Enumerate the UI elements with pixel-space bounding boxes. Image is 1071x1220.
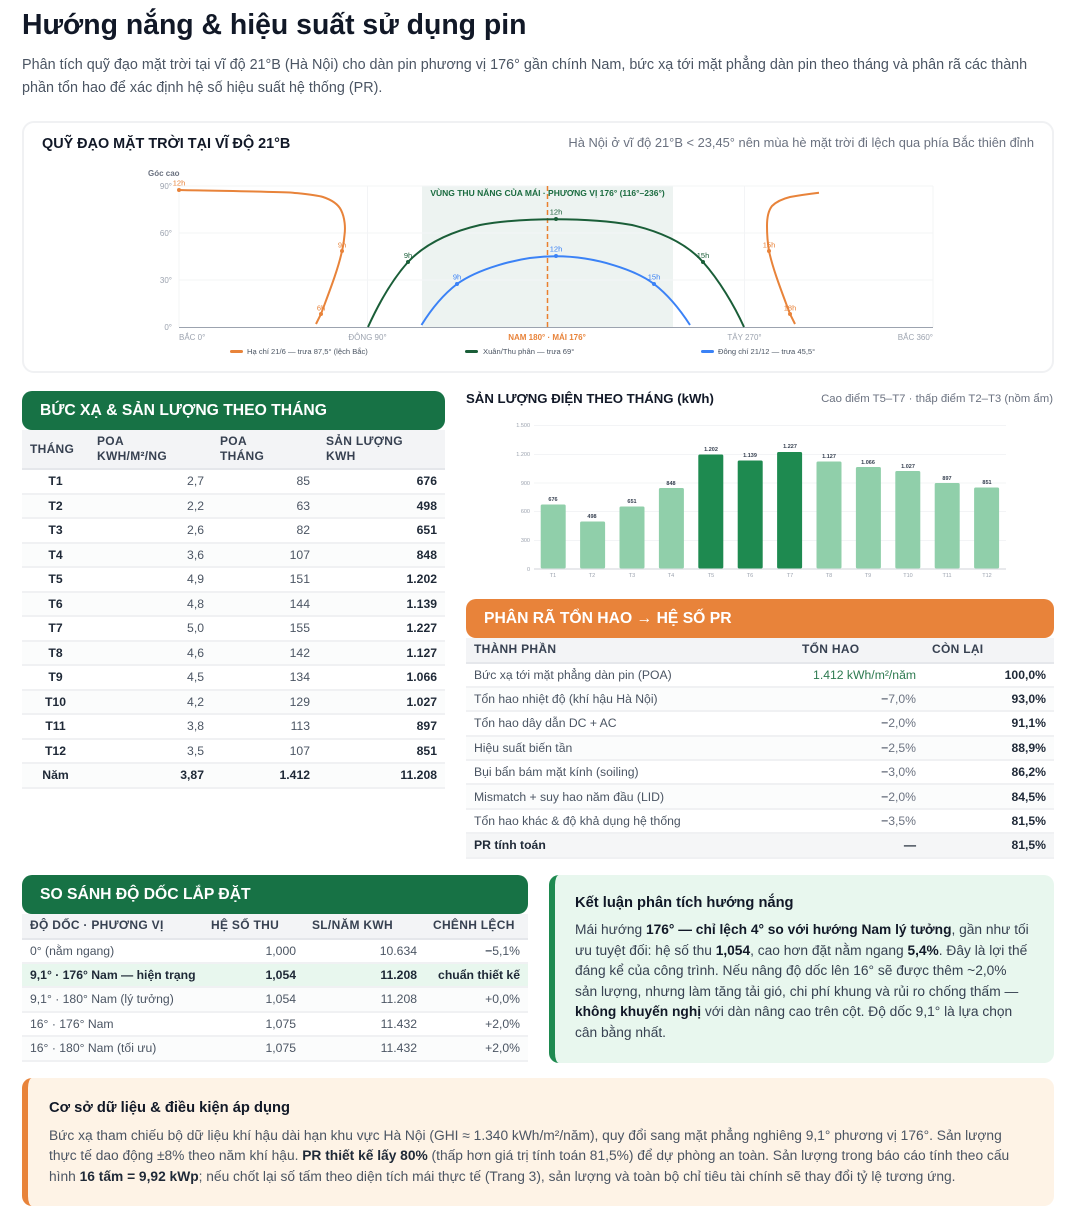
loss table: 1.412 kWh/m²/năm (813, 668, 916, 682)
loss table: −3,5% (881, 814, 916, 828)
data basis text (49, 1128, 1009, 1184)
monthly bar chart: T1 (550, 573, 556, 579)
conclusion text: sản lượng, nhưng làm tăng tải gió, chi phí khung và rủi ro chống thấm — (575, 984, 1018, 999)
tilt heading (22, 875, 528, 914)
monthly table: T7 (48, 621, 63, 635)
monthly table: 134 (290, 670, 310, 684)
bar chart heading: SẢN LƯỢNG ĐIỆN THEO THÁNG (kWh) (466, 391, 714, 406)
sun path chart: BẮC 0° (179, 333, 205, 342)
data basis text: hình 16 tấm = 9,92 kWp; nếu chốt lại số tấm theo diện tích mái thực tế (Trang 3), sản lượng và toàn bộ chỉ tiêu tài chính sẽ thay đổi tỷ lệ tương ứng. (49, 1168, 955, 1184)
sun path chart: ĐÔNG 90° (348, 333, 387, 342)
loss table: 81,5% (1011, 814, 1046, 828)
tilt table: HỆ SỐ THU (211, 918, 279, 932)
sun path chart: 0° (164, 323, 172, 332)
monthly bar chart: 300 (521, 538, 530, 544)
monthly table: 1.027 (406, 695, 437, 709)
summer solstice curve: 6h (317, 304, 325, 312)
sun path chart: BẮC 360° (898, 333, 933, 342)
sun path chart: VÙNG THU NĂNG CỦA MÁI · PHƯƠNG VỊ 176° (116°–236°) (430, 187, 665, 198)
monthly table: 651 (417, 523, 437, 537)
sun path note: Hà Nội ở vĩ độ 21°B < 23,45° nên mùa hè mặt trời đi lệch qua phía Bắc thiên đỉnh (568, 135, 1034, 150)
data basis text: Bức xạ tham chiếu bộ dữ liệu khí hậu dài hạn khu vực Hà Nội (GHI ≈ 1.340 kWh/m²/năm), quy đổi sang mặt phẳng nghiêng 9,1° phương vị 176°. Sản lượng (49, 1128, 1002, 1142)
tilt table: +2,0% (485, 1017, 520, 1031)
monthly bar chart: 848 (666, 481, 676, 487)
summer solstice curve: 15h (763, 240, 775, 250)
loss table: −3,0% (881, 765, 916, 779)
tilt table: 0° (nằm ngang) (30, 944, 114, 958)
panel: loss breakdown (466, 599, 1054, 859)
monthly table: 1.227 (406, 621, 437, 635)
monthly bar chart: 498 (587, 514, 597, 520)
loss table: 84,5% (1011, 790, 1046, 804)
equinox curve (368, 208, 744, 327)
data basis title: Cơ sở dữ liệu & điều kiện áp dụng (49, 1100, 290, 1116)
monthly table: 129 (290, 695, 310, 709)
loss table: Tổn hao khác & độ khả dụng hệ thống (474, 814, 681, 828)
sun path chart: NAM 180° · MÁI 176° (508, 333, 586, 342)
loss table: Tổn hao nhiệt độ (khí hậu Hà Nội) (474, 692, 658, 706)
monthly bar chart: 0 (527, 567, 530, 573)
monthly bar chart: 651 (627, 499, 637, 505)
monthly table: 4,9 (187, 572, 204, 586)
conclusion text: đáng kể của công trình. Nếu nâng độ dốc lên 16° sẽ được thêm ~2,0% (575, 963, 1007, 978)
monthly table: 2,7 (187, 474, 204, 488)
tilt table: −5,1% (485, 944, 520, 958)
monthly bar chart: T4 (668, 573, 674, 579)
tilt table: 1,075 (266, 1041, 296, 1055)
winter solstice curve: 15h (648, 272, 660, 282)
monthly table: T1 (48, 474, 63, 488)
monthly table: 3,87 (180, 768, 204, 782)
monthly table: T11 (45, 719, 66, 733)
monthly bar chart: T3 (629, 573, 635, 579)
monthly table: T5 (48, 572, 63, 586)
monthly bar chart: 1.139 (743, 453, 757, 459)
winter solstice curve: 9h (453, 272, 461, 282)
conclusion text: ưu tuyệt đối: hệ số thu 1,054, cao hơn đặt nằm ngang 5,4%. Đây là lợi thế (575, 943, 1027, 958)
monthly bar chart: 676 (548, 497, 558, 503)
sun path chart: TÂY 270° (727, 333, 762, 342)
monthly table: KWH (326, 449, 356, 463)
monthly bar chart: 1.027 (901, 464, 915, 470)
loss table: Hiệu suất biến tần (474, 741, 572, 755)
tilt table: 1,000 (266, 944, 296, 958)
conclusion text: không khuyến nghị với dàn nâng cao trên cột. Độ dốc 9,1° là lựa chọn (575, 1004, 1012, 1019)
monthly bar chart: 897 (942, 476, 952, 482)
monthly bar chart: 1.066 (861, 460, 875, 466)
chart legend: Xuân/Thu phân — trưa 69° (483, 347, 574, 356)
tilt table: 1,075 (266, 1017, 296, 1031)
monthly table: 155 (290, 621, 310, 635)
monthly table: T12 (45, 744, 66, 758)
monthly table: 4,2 (187, 695, 204, 709)
monthly bar chart: 1.200 (516, 452, 530, 458)
monthly table: 4,6 (187, 646, 204, 660)
equinox curve: 12h (550, 208, 562, 216)
loss table: THÀNH PHẦN (474, 642, 556, 656)
loss table: 91,1% (1011, 716, 1046, 730)
callout: data basis (22, 1078, 1054, 1206)
tilt table: 11.208 (381, 992, 417, 1006)
tilt table: 1,054 (266, 968, 296, 982)
title: Hướng nắng & hiệu suất sử dụng pin (22, 9, 526, 41)
monthly table: T10 (45, 695, 66, 709)
conclusion text: Mái hướng 176° — chỉ lệch 4° so với hướng Nam lý tưởng, gần như tối (575, 922, 1029, 937)
sun path chart: 30° (160, 276, 172, 285)
loss table: — (904, 838, 916, 852)
loss table: −2,5% (881, 741, 916, 755)
sun path chart: 60° (160, 229, 172, 238)
tilt table: 16° · 176° Nam (30, 1017, 114, 1031)
monthly bar chart: T8 (826, 573, 832, 579)
loss heading (466, 599, 1054, 638)
equinox curve: 15h (697, 251, 709, 260)
monthly bar chart: T2 (589, 573, 595, 579)
monthly table: SẢN LƯỢNG (326, 434, 403, 448)
monthly bar chart: T6 (747, 573, 753, 579)
conclusion title: Kết luận phân tích hướng nắng (575, 895, 794, 911)
loss table: 93,0% (1011, 692, 1046, 706)
loss table: Bụi bẩn bám mặt kính (soiling) (474, 765, 639, 779)
summer solstice curve: 9h (338, 240, 346, 250)
tilt heading: SO SÁNH ĐỘ DỐC LẮP ĐẶT (40, 886, 251, 902)
sun path chart: Góc cao (148, 169, 180, 178)
tilt table: CHÊNH LỆCH (433, 918, 515, 932)
equinox curve: 9h (404, 251, 412, 260)
intro text: Phân tích quỹ đạo mặt trời tại vĩ độ 21°B (Hà Nội) cho dàn pin phương vị 176° gần chính Nam, bức xạ tới mặt phẳng dàn pin theo tháng và phân rã các thành (22, 57, 1027, 73)
monthly bar chart: 1.202 (704, 447, 718, 453)
loss table: Bức xạ tới mặt phẳng dàn pin (POA) (474, 668, 672, 682)
monthly table (22, 430, 445, 789)
monthly table: 5,0 (187, 621, 204, 635)
tilt table: 9,1° · 180° Nam (lý tưởng) (30, 992, 174, 1006)
monthly table: 848 (417, 548, 437, 562)
tilt table: 11.432 (381, 1017, 417, 1031)
monthly bar chart: T9 (865, 573, 871, 579)
loss table: 86,2% (1011, 765, 1046, 779)
sun path chart: 90° (160, 182, 172, 191)
monthly table: 498 (417, 499, 437, 513)
monthly table: 851 (417, 744, 437, 758)
loss table: TỔN HAO (802, 642, 859, 656)
monthly table: KWH/M²/NG (97, 449, 167, 463)
table heading: BỨC XẠ & SẢN LƯỢNG THEO THÁNG (40, 402, 327, 418)
intro text (22, 56, 1027, 96)
tilt table: chuẩn thiết kế (438, 968, 520, 982)
loss table: Tổn hao dây dẫn DC + AC (474, 716, 617, 730)
tilt table: ĐỘ DỐC · PHƯƠNG VỊ (30, 918, 164, 932)
summer solstice curve: 18h (784, 304, 796, 312)
monthly bar chart: 900 (521, 481, 530, 487)
monthly table: 107 (290, 548, 310, 562)
monthly bar chart: 600 (521, 509, 530, 515)
monthly table: T3 (48, 523, 63, 537)
monthly table: 3,5 (187, 744, 204, 758)
monthly table: 82 (296, 523, 310, 537)
monthly table: 142 (290, 646, 310, 660)
panel: monthly irradiation table (22, 391, 445, 789)
monthly table: 144 (290, 597, 310, 611)
conclusion text (575, 922, 1029, 1040)
monthly bar chart: T10 (903, 573, 913, 579)
sun path chart (148, 169, 934, 356)
monthly table: POA (97, 434, 124, 448)
monthly table: 63 (296, 499, 310, 513)
loss table: PR tính toán (474, 838, 546, 852)
loss table: Mismatch + suy hao năm đầu (LID) (474, 790, 664, 804)
monthly bar chart (516, 423, 1006, 579)
winter solstice curve (422, 244, 690, 325)
monthly table: 2,6 (187, 523, 204, 537)
monthly table: 897 (417, 719, 437, 733)
monthly table: 85 (296, 474, 310, 488)
monthly table: 3,6 (187, 548, 204, 562)
bar chart note: Cao điểm T5–T7 · thấp điểm T2–T3 (nồm ẩm) (821, 393, 1053, 405)
monthly table: 4,8 (187, 597, 204, 611)
monthly table: 4,5 (187, 670, 204, 684)
tilt table (22, 914, 528, 1062)
monthly table: 1.066 (406, 670, 437, 684)
monthly table: 676 (417, 474, 437, 488)
monthly table: 113 (291, 719, 310, 733)
chart legend: Hạ chí 21/6 — trưa 87,5° (lệch Bắc) (247, 347, 368, 356)
callout: conclusion (549, 875, 1054, 1063)
monthly table: T4 (48, 548, 63, 562)
monthly table: THÁNG (30, 442, 74, 456)
monthly table: 1.412 (280, 768, 310, 782)
conclusion text: cân bằng nhất. (575, 1025, 666, 1040)
sun path heading: QUỸ ĐẠO MẶT TRỜI TẠI VĨ ĐỘ 21°B (42, 136, 290, 152)
monthly bar chart: T12 (982, 573, 992, 579)
monthly table: 1.127 (406, 646, 437, 660)
monthly table: 11.208 (400, 768, 437, 782)
loss table: −2,0% (881, 716, 916, 730)
loss table (466, 638, 1054, 859)
monthly bar chart: 851 (982, 480, 992, 486)
monthly bar chart: 1.127 (822, 454, 836, 460)
winter solstice curve: 12h (550, 244, 562, 254)
monthly table: 3,8 (187, 719, 204, 733)
chart legend (230, 347, 815, 356)
loss table: 100,0% (1005, 668, 1046, 682)
monthly table: T8 (48, 646, 63, 660)
loss heading: PHÂN RÃ TỔN HAO → HỆ SỐ PR (484, 610, 732, 626)
monthly table: 1.202 (406, 572, 437, 586)
data basis text: thực tế dao động ±8% theo năm khí hậu. PR thiết kế lấy 80% (thấp hơn giá trị tính toán 81,5%) để dự phòng an toàn. Sản lượng trong báo cáo tính theo cấu (49, 1148, 1009, 1163)
monthly table: 151 (290, 572, 310, 586)
monthly table: T9 (48, 670, 63, 684)
loss table: 88,9% (1011, 741, 1046, 755)
loss table: CÒN LẠI (932, 642, 983, 656)
summer solstice curve (173, 178, 819, 324)
loss table: 81,5% (1011, 838, 1046, 852)
monthly bar chart: 1.227 (783, 444, 797, 450)
monthly bar chart: 1.500 (516, 423, 530, 429)
monthly table: T2 (48, 499, 63, 513)
tilt table: 16° · 180° Nam (tối ưu) (30, 1041, 156, 1055)
monthly table: 2,2 (187, 499, 204, 513)
monthly bar chart: T5 (708, 573, 714, 579)
panel: sun path (22, 121, 1054, 373)
loss table: −7,0% (881, 692, 916, 706)
chart legend: Đông chí 21/12 — trưa 45,5° (718, 347, 815, 356)
tilt table: 10.634 (380, 944, 417, 958)
panel: tilt comparison (22, 875, 528, 1062)
monthly table: 1.139 (406, 597, 437, 611)
monthly bar chart: T11 (942, 573, 952, 579)
summer solstice curve: 12h (173, 178, 185, 188)
tilt table: 9,1° · 176° Nam — hiện trạng (30, 968, 196, 982)
intro text: phần tổn hao để xác định hệ số hiệu suất hệ thống (PR). (22, 80, 382, 96)
monthly table: Năm (42, 768, 69, 782)
tilt table: SL/NĂM KWH (312, 918, 393, 932)
tilt table: +0,0% (485, 992, 520, 1006)
tilt table: +2,0% (485, 1041, 520, 1055)
monthly table: 107 (290, 744, 310, 758)
table heading (22, 391, 445, 430)
monthly table: THÁNG (220, 449, 264, 463)
tilt table: 1,054 (266, 992, 296, 1006)
loss table: −2,0% (881, 790, 916, 804)
monthly table: POA (220, 434, 247, 448)
monthly bar chart: T7 (787, 573, 793, 579)
tilt table: 11.208 (380, 968, 417, 982)
tilt table: 11.432 (381, 1041, 417, 1055)
monthly table: T6 (48, 597, 63, 611)
